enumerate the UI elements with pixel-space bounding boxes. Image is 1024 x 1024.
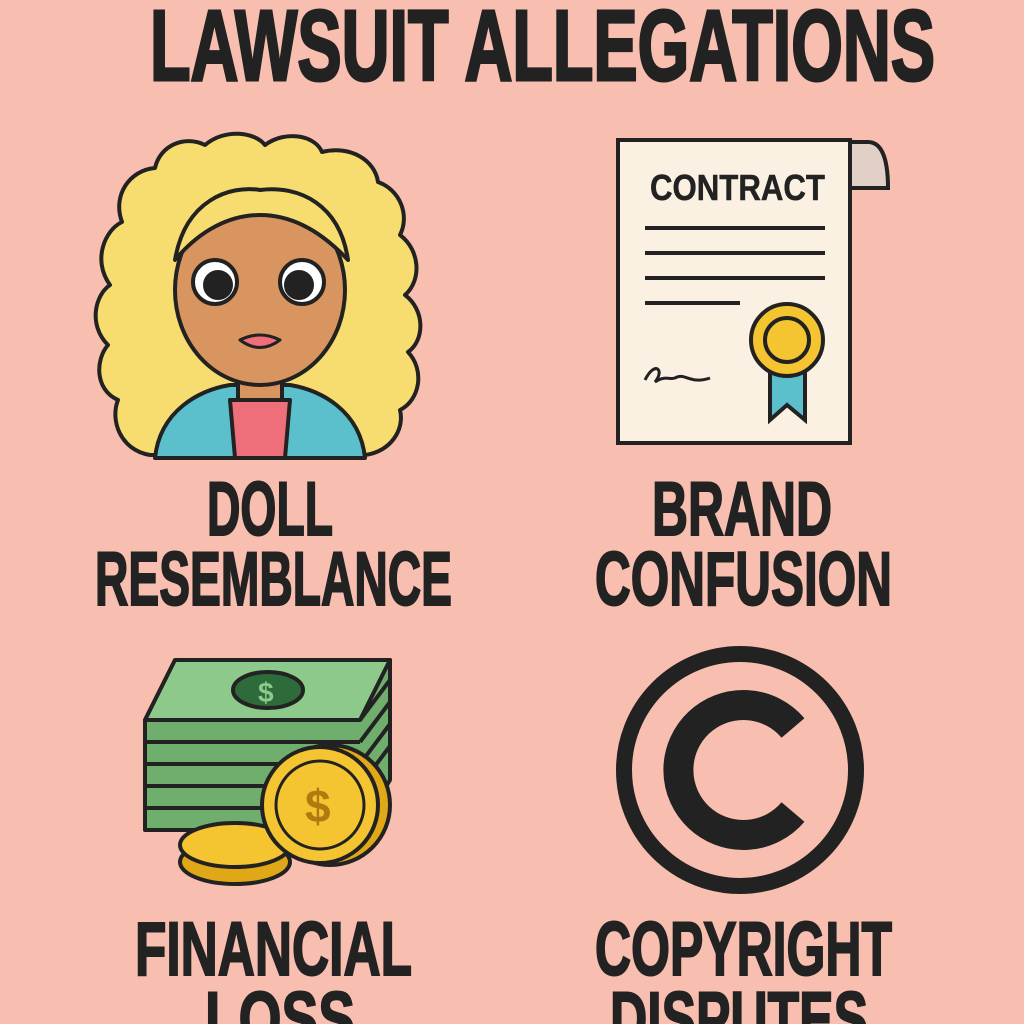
label: copyright disputes [595, 907, 892, 1024]
icon: contract: CONTRACT [650, 167, 825, 208]
label: doll resemblance: RESEMBLANCE [95, 537, 452, 622]
icon: contract [618, 140, 888, 443]
label: brand confusion: BRAND [652, 467, 832, 552]
label: brand confusion [595, 467, 892, 622]
icon: money [145, 660, 390, 884]
label: financial loss [135, 907, 412, 1024]
label: doll resemblance: DOLL [207, 467, 333, 552]
icon: money: $ [305, 780, 331, 832]
label: financial loss: FINANCIAL [135, 907, 412, 992]
label: doll resemblance [95, 467, 452, 622]
icon: money: $ [258, 677, 274, 708]
icon: doll [96, 134, 420, 458]
icon: copyright [624, 654, 856, 886]
